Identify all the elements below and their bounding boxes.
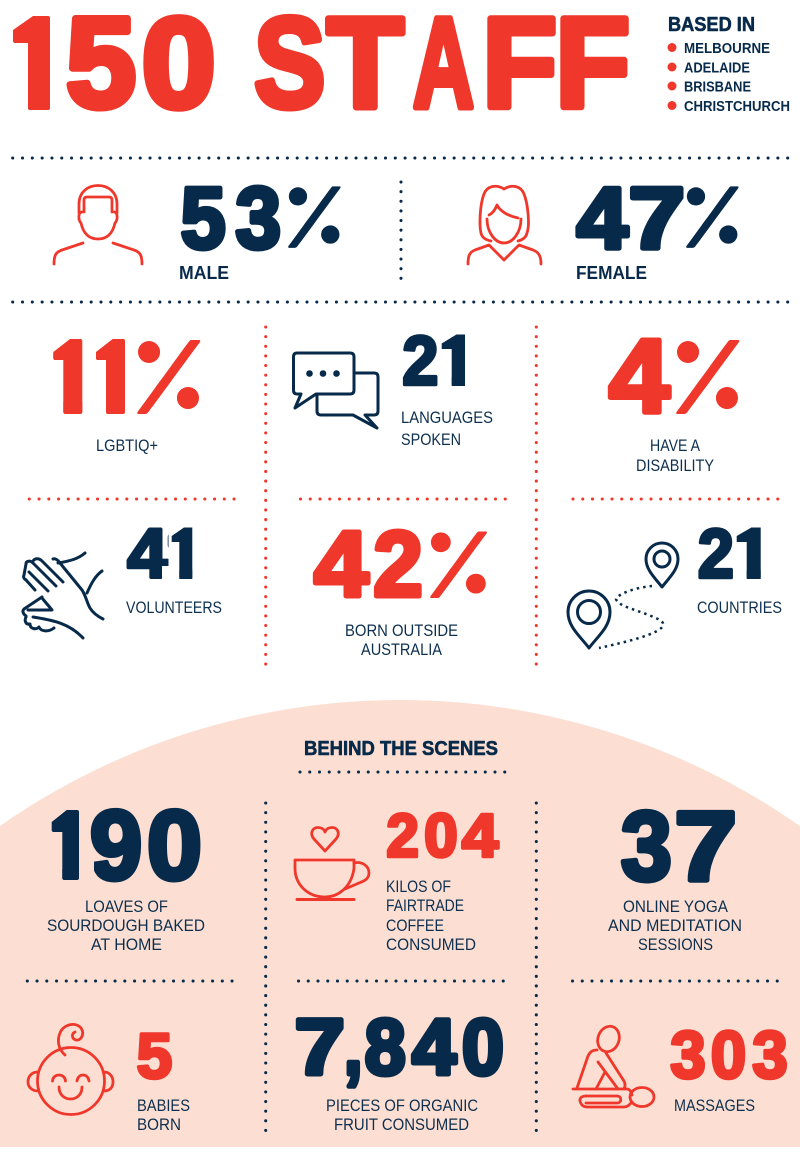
icon: male person bbox=[54, 186, 142, 264]
stat: born outside Australia: AUSTRALIA bbox=[361, 641, 442, 659]
panel: male bbox=[52, 184, 341, 279]
stat: sourdough bbox=[48, 808, 204, 950]
stat: languages: SPOKEN bbox=[401, 431, 461, 449]
stat: LGBTIQ+: LGBTIQ+ bbox=[96, 437, 158, 455]
location: Adelaide: ADELAIDE bbox=[684, 60, 750, 76]
stat: fruit: FRUIT CONSUMED bbox=[334, 1116, 469, 1134]
stat: disability: HAVE A bbox=[650, 437, 700, 455]
stat: fruit: , bbox=[344, 1002, 362, 1091]
stat: coffee: COFFEE bbox=[386, 917, 444, 935]
icon: map pins bbox=[568, 543, 678, 648]
number: 47: 4 bbox=[577, 170, 628, 267]
stat: yoga: ONLINE YOGA bbox=[623, 898, 728, 916]
label: male: MALE bbox=[179, 263, 229, 283]
stat: sourdough: 9 bbox=[90, 790, 142, 900]
stat: disability: % bbox=[676, 324, 739, 436]
label: female: FEMALE bbox=[576, 263, 647, 283]
stat: LGBTIQ+: 1 bbox=[47, 322, 95, 434]
stat: sourdough: LOAVES OF bbox=[85, 898, 168, 916]
panel: female bbox=[466, 184, 739, 279]
stat: fruit: 8 bbox=[365, 1002, 406, 1091]
stat: massages: MASSAGES bbox=[674, 1097, 755, 1115]
icon: massage bbox=[573, 1023, 654, 1107]
stat: born outside Australia bbox=[312, 528, 487, 655]
stat: LGBTIQ+: % bbox=[137, 324, 200, 436]
stat: languages: 1 bbox=[440, 322, 474, 400]
location: Brisbane: BRISBANE bbox=[684, 80, 751, 96]
stat: yoga: AND MEDITATION bbox=[608, 917, 742, 935]
location: Christchurch: CHRISTCHURCH bbox=[684, 99, 790, 115]
stat: yoga: 7 bbox=[674, 791, 737, 901]
stat: babies bbox=[28, 1020, 190, 1134]
number: 53: 5 bbox=[181, 170, 226, 267]
icon: baby face bbox=[28, 1024, 113, 1114]
number: 53: 3 bbox=[236, 170, 281, 267]
stat: volunteers: VOLUNTEERS bbox=[126, 599, 222, 617]
icon: speech bubbles bbox=[294, 353, 378, 428]
stat: languages: 2 bbox=[402, 322, 438, 400]
stat: languages: LANGUAGES bbox=[401, 409, 493, 427]
stat: coffee: KILOS OF bbox=[386, 878, 451, 896]
stat: fruit: 7 bbox=[295, 1002, 345, 1091]
stat: languages bbox=[292, 334, 492, 445]
stat: massages: 0 bbox=[711, 1018, 746, 1093]
stat: disability: 4 bbox=[609, 318, 670, 435]
stat: born outside Australia: 2 bbox=[373, 512, 423, 616]
stat: countries bbox=[568, 514, 782, 648]
stat: born outside Australia: BORN OUTSIDE bbox=[345, 622, 458, 640]
stat: massages: 3 bbox=[670, 1018, 706, 1093]
stat: babies: 5 bbox=[137, 1020, 172, 1092]
stat: coffee: CONSUMED bbox=[386, 936, 476, 954]
location: Melbourne: MELBOURNE bbox=[684, 41, 770, 57]
stat: sourdough: 1 bbox=[50, 790, 88, 900]
stat: massages bbox=[573, 1018, 788, 1115]
stat: fruit: 0 bbox=[462, 1002, 504, 1091]
stat: fruit bbox=[295, 1002, 504, 1134]
stat: babies: BORN bbox=[137, 1116, 181, 1134]
stat: coffee: 2 bbox=[386, 802, 419, 870]
stat: coffee: 4 bbox=[462, 802, 498, 870]
stat: yoga: 3 bbox=[621, 791, 672, 901]
stat: born outside Australia: 4 bbox=[314, 512, 369, 616]
percent sign: % bbox=[686, 172, 738, 265]
stat: volunteers: 4 bbox=[127, 514, 168, 592]
stat: volunteers bbox=[23, 514, 222, 638]
background arc panel bbox=[0, 700, 800, 1147]
stat: countries: 1 bbox=[736, 514, 769, 592]
stat: coffee: 0 bbox=[424, 802, 458, 870]
stat: fruit: 4 bbox=[412, 1002, 456, 1091]
stat: LGBTIQ+: 1 bbox=[90, 322, 137, 434]
stat: massages: 3 bbox=[752, 1018, 788, 1093]
stat: sourdough: SOURDOUGH BAKED bbox=[47, 917, 205, 935]
icon: female person bbox=[468, 186, 541, 264]
percent sign: % bbox=[288, 172, 340, 265]
stat: born outside Australia: % bbox=[430, 518, 487, 618]
stat: yoga: SESSIONS bbox=[638, 936, 713, 954]
heading: behind the scenes: BEHIND THE SCENES bbox=[304, 738, 498, 760]
stat: babies: BABIES bbox=[137, 1097, 190, 1115]
stat: sourdough: AT HOME bbox=[91, 936, 162, 954]
stat: coffee: FAIRTRADE bbox=[386, 897, 464, 915]
stat: fruit: PIECES OF ORGANIC bbox=[326, 1097, 478, 1115]
icon: hands bbox=[23, 553, 103, 638]
stat: LGBTIQ+ bbox=[53, 339, 200, 454]
heading: based in: BASED IN bbox=[668, 14, 755, 36]
stat: volunteers: 1 bbox=[168, 514, 201, 592]
stat: disability: DISABILITY bbox=[636, 457, 714, 475]
panel: locations bbox=[668, 14, 790, 115]
stat: coffee bbox=[295, 802, 498, 954]
number: 47: 7 bbox=[628, 170, 685, 267]
stat: sourdough: 0 bbox=[147, 790, 202, 900]
icon: coffee cup with heart bbox=[295, 828, 369, 900]
stat: disability bbox=[608, 338, 740, 471]
stat: yoga bbox=[608, 791, 742, 954]
stat: countries: 2 bbox=[698, 514, 734, 592]
stat: countries: COUNTRIES bbox=[697, 599, 782, 617]
